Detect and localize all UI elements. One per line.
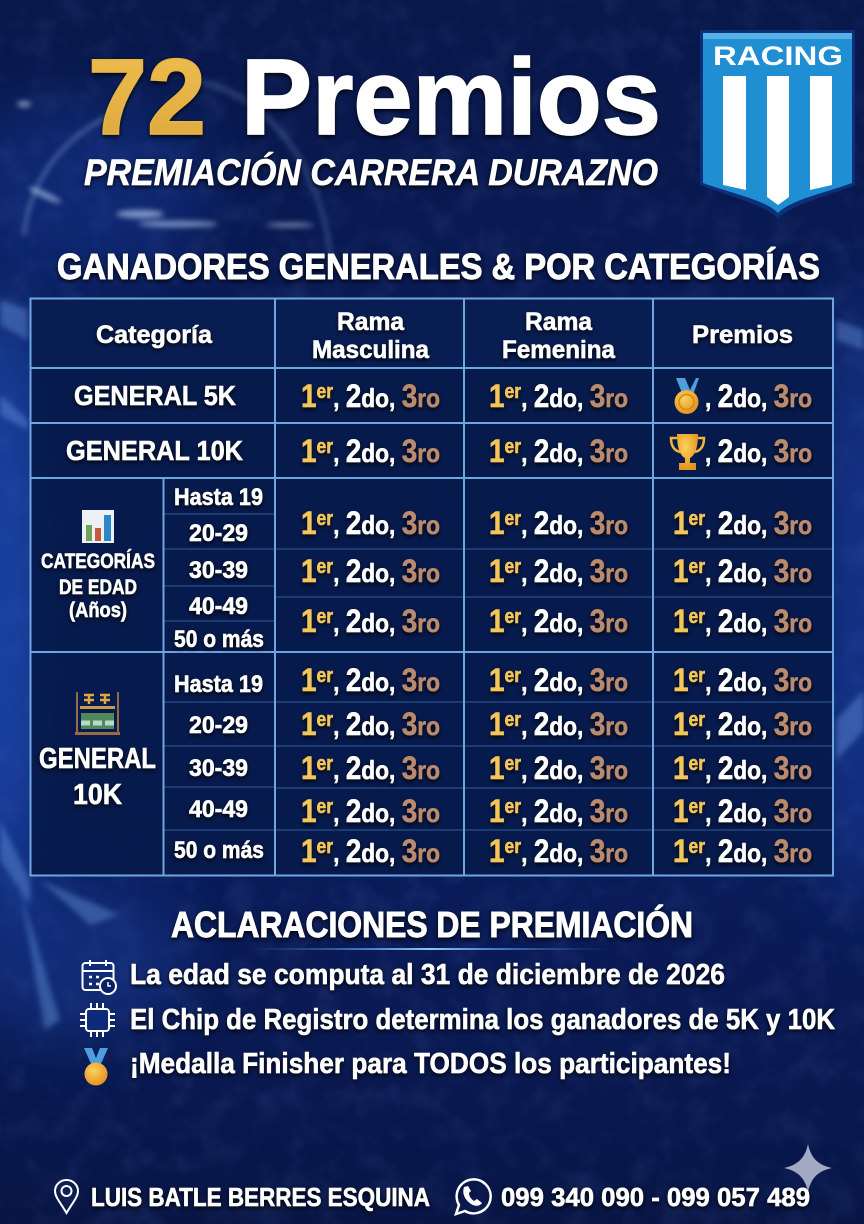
results: categorías de edad: 2do, 3ro bbox=[534, 603, 631, 639]
age list: general 10K bbox=[174, 671, 264, 864]
results: general 10K: 1 bbox=[489, 833, 505, 869]
results: categorías de edad: , bbox=[705, 608, 718, 638]
results: general 10K: er bbox=[689, 665, 705, 687]
results: general 10K: , bbox=[521, 798, 534, 828]
age list: general 10K: 20-29 bbox=[189, 712, 248, 739]
panel: categorías de edad label bbox=[41, 510, 155, 622]
results: general 10K: 1 bbox=[301, 793, 317, 829]
panel: categorías de edad label: CATEGORÍAS bbox=[41, 550, 155, 573]
row: General 5K: GENERAL 5K bbox=[74, 380, 236, 411]
results: general 10K: 1 bbox=[489, 662, 505, 698]
results: general 10K: 2do, 3ro bbox=[534, 833, 631, 869]
results: general 10K: 1 bbox=[301, 706, 317, 742]
icon: calendar bbox=[82, 960, 116, 994]
results: general 10K: er bbox=[689, 796, 705, 818]
age list: general 10K: 50 o más bbox=[174, 837, 264, 864]
icon: finisher medal bbox=[84, 1048, 108, 1086]
results: categorías de edad: er bbox=[505, 606, 521, 628]
results: general 10K: 1 bbox=[673, 706, 689, 742]
table header: Rama bbox=[337, 308, 405, 336]
footer: phone: 099 340 090 - 099 057 489 bbox=[501, 1182, 810, 1212]
table bbox=[30, 298, 833, 876]
results: general 10K: 2do, 3ro bbox=[346, 750, 443, 786]
results: categorías de edad: 2do, 3ro bbox=[346, 603, 443, 639]
results: categorías de edad: er bbox=[505, 508, 521, 530]
results: general 10K: , bbox=[521, 711, 534, 741]
row: General 10K bbox=[66, 433, 812, 470]
icon: medal bbox=[674, 378, 699, 414]
footer: address: LUIS BATLE BERRES ESQUINA bbox=[91, 1182, 430, 1212]
results: general 10K: er bbox=[689, 836, 705, 858]
row: General 5K: 1 bbox=[301, 378, 317, 414]
results: general 10K: , bbox=[705, 798, 718, 828]
panel: categorías de edad label: (Años) bbox=[69, 599, 127, 622]
results: general 10K: , bbox=[705, 838, 718, 868]
row: General 10K: 2do, 3ro bbox=[534, 433, 631, 469]
results: general 10K: er bbox=[505, 665, 521, 687]
row: General 5K: 2do, 3ro bbox=[346, 378, 443, 414]
results: categorías de edad: 1 bbox=[301, 505, 317, 541]
results: general 10K: er bbox=[317, 796, 333, 818]
results: general 10K: 1 bbox=[673, 793, 689, 829]
row: General 10K: 1 bbox=[301, 433, 317, 469]
results: categorías de edad: 2do, 3ro bbox=[718, 553, 815, 589]
results: general 10K: 1 bbox=[301, 662, 317, 698]
age list: categorías de edad: Hasta 19 bbox=[174, 484, 263, 511]
results: general 10K: , bbox=[521, 755, 534, 785]
results: categorías de edad: 1 bbox=[673, 505, 689, 541]
results: general 10K: 2do, 3ro bbox=[346, 793, 443, 829]
results: general 10K: 2do, 3ro bbox=[534, 706, 631, 742]
results: general 10K: er bbox=[317, 665, 333, 687]
panel: general 10K label: 10K bbox=[73, 779, 122, 811]
watermark star bbox=[784, 1144, 832, 1192]
note: medalla: ¡Medalla Finisher para TODOS los participantes! bbox=[130, 1048, 731, 1080]
results: categorías de edad: 2do, 3ro bbox=[534, 505, 631, 541]
panel: categorías de edad label: DE EDAD bbox=[59, 576, 137, 599]
results: general 10K: , bbox=[333, 711, 346, 741]
icon: trophy shelf bbox=[75, 692, 120, 735]
panel: general 10K label: GENERAL bbox=[39, 743, 156, 775]
table header: Femenina bbox=[502, 336, 616, 364]
age list: general 10K: 40-49 bbox=[189, 796, 248, 823]
results: categorías de edad: er bbox=[317, 508, 333, 530]
results: general 10K: er bbox=[505, 753, 521, 775]
row: General 5K: er bbox=[505, 381, 521, 403]
results: categorías de edad: er bbox=[689, 606, 705, 628]
results: categorías de edad: , bbox=[333, 558, 346, 588]
row: General 10K: , bbox=[521, 438, 534, 468]
results: general 10K: , bbox=[521, 667, 534, 697]
results: general 10K: , bbox=[333, 667, 346, 697]
age list: categorías de edad: 50 o más bbox=[174, 626, 264, 653]
results: general 10K: 2do, 3ro bbox=[346, 662, 443, 698]
row: General 10K: GENERAL 10K bbox=[66, 435, 243, 466]
title: 72 Premios: 72 bbox=[88, 36, 206, 157]
results: general 10K: 2do, 3ro bbox=[718, 706, 815, 742]
age list: categorías de edad: 30-39 bbox=[189, 557, 248, 584]
row: General 10K: er bbox=[317, 436, 333, 458]
row: General 5K: 1 bbox=[489, 378, 505, 414]
results: general 10K: 2do, 3ro bbox=[718, 750, 815, 786]
results: general 10K: , bbox=[333, 838, 346, 868]
results: categorías de edad: 1 bbox=[673, 553, 689, 589]
results: categorías de edad: er bbox=[689, 556, 705, 578]
results: categorías de edad: 1 bbox=[489, 505, 505, 541]
results: categorías de edad: er bbox=[505, 556, 521, 578]
results: general 10K: er bbox=[317, 753, 333, 775]
row: General 10K: er bbox=[505, 436, 521, 458]
results: categorías de edad: , bbox=[333, 608, 346, 638]
icon: chip bbox=[80, 1003, 115, 1037]
results: general 10K: 1 bbox=[673, 833, 689, 869]
results: categorías de edad: 1 bbox=[301, 603, 317, 639]
results: categorías de edad: 2do, 3ro bbox=[718, 505, 815, 541]
table header: Categoría bbox=[96, 321, 213, 349]
results: categorías de edad: , bbox=[705, 558, 718, 588]
row: General 5K: 2do, 3ro bbox=[534, 378, 631, 414]
results: categorías de edad: 2do, 3ro bbox=[346, 553, 443, 589]
results: general 10K: er bbox=[505, 709, 521, 731]
results: general 10K bbox=[301, 662, 812, 869]
icon: trophy bbox=[671, 434, 704, 470]
row: General 10K: , bbox=[333, 438, 346, 468]
row: General 10K: 2do, 3ro bbox=[346, 433, 443, 469]
results: general 10K: 1 bbox=[301, 833, 317, 869]
row: General 5K: , bbox=[333, 383, 346, 413]
results: general 10K: , bbox=[333, 755, 346, 785]
results: categorías de edad: , bbox=[521, 558, 534, 588]
row: General 10K: , 2do, 3ro bbox=[705, 433, 812, 469]
results: general 10K: 2do, 3ro bbox=[346, 833, 443, 869]
results: general 10K: 1 bbox=[673, 662, 689, 698]
results: categorías de edad: , bbox=[333, 510, 346, 540]
logo: Racing shield: RACING bbox=[713, 41, 843, 71]
results: general 10K: er bbox=[317, 836, 333, 858]
results: general 10K: 2do, 3ro bbox=[718, 793, 815, 829]
results: general 10K: 1 bbox=[301, 750, 317, 786]
results: general 10K: , bbox=[705, 667, 718, 697]
results: general 10K: 2do, 3ro bbox=[534, 662, 631, 698]
icon: whatsapp bbox=[456, 1179, 491, 1214]
table header: Premios bbox=[692, 321, 793, 349]
results: general 10K: er bbox=[505, 796, 521, 818]
table header: Masculina bbox=[312, 336, 430, 364]
results: categorías de edad: 1 bbox=[673, 603, 689, 639]
results: categorías de edad: 1 bbox=[489, 603, 505, 639]
results: categorías de edad: 2do, 3ro bbox=[718, 603, 815, 639]
heading: aclaraciones: ACLARACIONES DE PREMIACIÓN bbox=[171, 903, 693, 945]
results: categorías de edad: 2do, 3ro bbox=[346, 505, 443, 541]
results: categorías de edad: 2do, 3ro bbox=[534, 553, 631, 589]
table header: Rama bbox=[525, 308, 593, 336]
results: general 10K: , bbox=[705, 755, 718, 785]
results: categorías de edad: , bbox=[705, 510, 718, 540]
results: categorías de edad: 1 bbox=[489, 553, 505, 589]
results: general 10K: , bbox=[705, 711, 718, 741]
row: General 5K: , bbox=[521, 383, 534, 413]
table header bbox=[96, 308, 793, 364]
results: general 10K: , bbox=[521, 838, 534, 868]
results: categorías de edad: er bbox=[689, 508, 705, 530]
results: general 10K: er bbox=[689, 753, 705, 775]
row: General 5K: , 2do, 3ro bbox=[705, 378, 812, 414]
results: general 10K: 1 bbox=[489, 793, 505, 829]
icon: location pin bbox=[55, 1180, 78, 1213]
results: general 10K: 2do, 3ro bbox=[534, 750, 631, 786]
results: general 10K: 2do, 3ro bbox=[346, 706, 443, 742]
results: general 10K: er bbox=[689, 709, 705, 731]
row: General 5K bbox=[74, 378, 812, 414]
results: general 10K: er bbox=[317, 709, 333, 731]
row: General 10K: 1 bbox=[489, 433, 505, 469]
results: general 10K: 1 bbox=[489, 706, 505, 742]
results: general 10K: 1 bbox=[673, 750, 689, 786]
results: categorías de edad: er bbox=[317, 556, 333, 578]
subtitle: PREMIACIÓN CARRERA DURAZNO bbox=[84, 152, 658, 193]
results: general 10K: er bbox=[505, 836, 521, 858]
row: General 5K: er bbox=[317, 381, 333, 403]
results: general 10K: 1 bbox=[489, 750, 505, 786]
age list: general 10K: 30-39 bbox=[189, 755, 248, 782]
age list: general 10K: Hasta 19 bbox=[174, 671, 263, 698]
results: general 10K: , bbox=[333, 798, 346, 828]
results: general 10K: 2do, 3ro bbox=[718, 833, 815, 869]
age list: categorías de edad: 20-29 bbox=[189, 520, 248, 547]
age list: categorías de edad bbox=[174, 484, 264, 653]
note: edad: La edad se computa al 31 de diciembre de 2026 bbox=[130, 959, 725, 991]
title: 72 Premios: Premios bbox=[241, 36, 661, 157]
results: general 10K: 2do, 3ro bbox=[718, 662, 815, 698]
results: categorías de edad: er bbox=[317, 606, 333, 628]
results: general 10K: 2do, 3ro bbox=[534, 793, 631, 829]
age list: categorías de edad: 40-49 bbox=[189, 593, 248, 620]
icon: bar chart bbox=[82, 510, 114, 543]
logo: Racing shield bbox=[700, 30, 855, 219]
panel: general 10K label bbox=[39, 692, 156, 811]
results: categorías de edad: , bbox=[521, 608, 534, 638]
results: categorías de edad: 1 bbox=[301, 553, 317, 589]
results: categorías de edad bbox=[301, 505, 812, 639]
results: categorías de edad: , bbox=[521, 510, 534, 540]
